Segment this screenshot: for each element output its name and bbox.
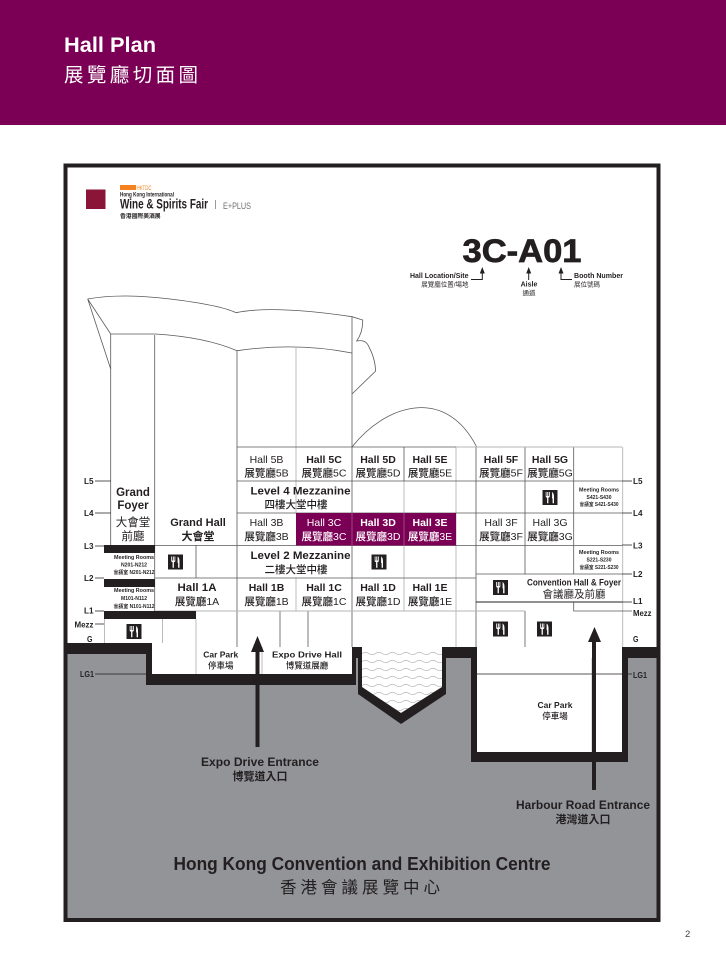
expo drive entrance label: Expo Drive Entrance [201, 757, 319, 769]
level 5 halls: Hall 5E [412, 454, 448, 466]
expo drive hall label [272, 650, 342, 670]
meeting rooms south lower: 會議室 S221-S230 [580, 564, 619, 571]
level 1 halls: Hall 1A [178, 582, 217, 594]
level 2 mezzanine: 二樓大堂中樓 [264, 563, 328, 576]
booth number legend: Aisle [521, 282, 537, 289]
booth number legend: 展位號碼 [574, 280, 600, 289]
meeting rooms south lower [579, 550, 619, 571]
level 3 halls: 展覽廳3G [527, 530, 573, 543]
level 5 halls: Hall 5D [360, 454, 396, 466]
icon: dining 5 [542, 490, 558, 505]
water pit pattern [362, 650, 442, 713]
level ticks: L2 [84, 574, 94, 583]
harbour road entrance label: 港灣道入口 [556, 812, 610, 826]
highlighted halls 3C 3D 3E: Hall 3E [412, 517, 448, 529]
level 4 mezzanine: Level 4 Mezzanine [250, 486, 350, 498]
logo: E+PLUS [223, 201, 251, 211]
level 5 halls: 展覽廳5C [302, 466, 347, 480]
level 5 halls: Hall 5C [306, 454, 342, 466]
meeting rooms north upper: 會議室 N201-N212 [114, 569, 155, 576]
meeting rooms south upper: S421-S430 [586, 495, 612, 501]
meeting rooms south upper [579, 488, 619, 508]
level 5 halls: Hall 5B [250, 454, 283, 466]
meeting rooms north upper [114, 555, 155, 576]
arrow: harbour road entrance [588, 627, 601, 790]
level 3 halls: 展覽廳3B [244, 530, 289, 543]
highlighted halls 3C 3D 3E [296, 513, 456, 546]
level ticks: L3 [84, 542, 94, 551]
expo drive hall label: Expo Drive Hall [272, 650, 342, 660]
meeting rooms south lower: S221-S230 [586, 558, 612, 564]
booth number legend [410, 233, 623, 297]
icon: dining 6 [493, 622, 508, 636]
level 1 halls: 展覽廳1A [175, 595, 219, 608]
logo: Wine & Spirits Fair [120, 197, 209, 212]
level ticks: L2 [633, 570, 643, 579]
logo [86, 185, 251, 220]
level ticks: LG1 [80, 670, 94, 679]
level 3 halls: Hall 3F [484, 517, 518, 529]
meeting rooms north lower: M101-N112 [121, 596, 147, 602]
booth number legend: 展覽廳位置/場地 [421, 280, 469, 289]
expo drive entrance label: 博覽道入口 [232, 769, 288, 783]
meeting rooms north lower [114, 588, 155, 610]
venue name [174, 854, 550, 897]
icon: dining 2 [126, 624, 142, 639]
highlighted halls 3C 3D 3E: Hall 3C [307, 517, 342, 529]
grand hall [170, 517, 226, 543]
car park east label [538, 700, 573, 721]
header banner [0, 0, 726, 125]
page number: 2 [685, 929, 690, 940]
arrow: expo drive entrance [251, 636, 264, 747]
car park west label: 停車場 [208, 660, 234, 670]
meeting rooms south upper: 會議室 S421-S430 [580, 501, 619, 508]
meeting rooms north upper: Meeting Rooms [114, 555, 154, 561]
title: Hall Plan: Hall Plan [64, 34, 156, 57]
level 5 halls: 展覽廳5G [527, 466, 573, 480]
level ticks: L4 [84, 509, 94, 518]
highlighted halls 3C 3D 3E: 展覽廳3C [302, 530, 347, 543]
booth number legend: Booth Number [574, 273, 623, 280]
arrow: hall location [471, 267, 485, 280]
car park west label: Car Park [203, 650, 238, 660]
harbour road entrance label: Harbour Road Entrance [516, 800, 650, 812]
logo: HKTDC [136, 186, 152, 192]
level 5 halls: 展覽廳5B [244, 466, 289, 480]
level ticks: L3 [633, 542, 643, 550]
grand hall: Grand Hall [170, 517, 226, 529]
level 5 halls: 展覽廳5D [356, 466, 401, 480]
highlighted halls 3C 3D 3E: 展覽廳3E [408, 530, 452, 543]
arrow: booth number [558, 267, 572, 280]
car park east label: Car Park [538, 700, 573, 710]
meeting rooms north lower: Meeting Rooms [114, 588, 154, 594]
icon: dining 4 [493, 580, 508, 595]
level ticks: L1 [84, 606, 94, 616]
level ticks: L5 [84, 477, 94, 486]
meeting rooms south upper: Meeting Rooms [579, 488, 619, 494]
panel: floor plan frame [66, 166, 658, 920]
icon: dining 1 [168, 554, 183, 570]
level ticks: L5 [633, 477, 643, 486]
level 1 halls: Hall 1E [412, 582, 448, 594]
grand foyer: 大會堂 [116, 515, 150, 529]
level 1 halls: 展覽廳1C [302, 595, 347, 608]
convention hall and foyer [527, 578, 621, 600]
black corridors [104, 545, 196, 619]
grand foyer: Grand [116, 487, 150, 499]
booth number legend: Hall Location/Site [410, 273, 469, 280]
level ticks [74, 477, 652, 680]
icon: dining 3 [372, 554, 386, 570]
level 4 mezzanine: 四樓大堂中樓 [264, 498, 328, 511]
icon: dining 7 [537, 622, 552, 636]
highlighted halls 3C 3D 3E: Hall 3D [360, 517, 396, 529]
level 1 halls [175, 582, 452, 608]
level ticks: G [87, 635, 92, 644]
level ticks: Mezz [74, 620, 94, 630]
level 5 halls [244, 454, 573, 480]
level ticks: Mezz [633, 609, 652, 618]
meeting rooms north upper: N201-N212 [121, 562, 147, 568]
ground section [67, 641, 657, 918]
level 2 mezzanine: Level 2 Mezzanine [250, 550, 350, 562]
level 3 halls [244, 517, 573, 543]
convention hall and foyer: Convention Hall & Foyer [527, 578, 621, 588]
highlighted halls 3C 3D 3E: 展覽廳3D [356, 530, 401, 543]
logo colour square [86, 190, 106, 209]
expo drive hall label: 博覽道展廳 [286, 660, 329, 670]
level 5 halls: Hall 5G [532, 454, 568, 466]
level ticks: LG1 [633, 671, 647, 680]
title: Chinese: 展覽廳切面圖 [64, 64, 201, 86]
logo: 香港國際美酒展 [120, 212, 161, 220]
building outline [88, 296, 632, 752]
arrow: aisle [526, 267, 531, 280]
level 4 mezzanine [250, 486, 350, 511]
level 1 halls: 展覽廳1E [408, 595, 452, 608]
booth number legend: 通道 [522, 288, 536, 297]
grand foyer: Foyer [117, 500, 149, 512]
venue name: Hong Kong Convention and Exhibition Centre [174, 854, 550, 874]
level ticks: L1 [633, 597, 643, 606]
level 3 halls: 展覽廳3F [479, 530, 523, 543]
level 1 halls: 展覽廳1B [244, 595, 289, 608]
expo drive entrance label [201, 757, 319, 783]
level 5 halls: 展覽廳5F [479, 466, 523, 480]
logo: Hong Kong International [120, 193, 174, 199]
level 1 halls: Hall 1B [249, 582, 285, 594]
level ticks: G [633, 635, 638, 644]
grand foyer: 前廳 [122, 529, 145, 543]
level 1 halls: Hall 1D [360, 582, 396, 594]
harbour road entrance label [516, 800, 650, 826]
level 3 halls: Hall 3B [250, 517, 283, 529]
level 3 halls: Hall 3G [532, 517, 568, 529]
level 5 halls: 展覽廳5E [408, 466, 452, 480]
car park east label: 停車場 [542, 711, 568, 721]
level 5 halls: Hall 5F [484, 454, 519, 466]
level 1 halls: Hall 1C [306, 582, 342, 594]
grand hall: 大會堂 [182, 529, 214, 543]
booth code: 3C-A01 [462, 233, 582, 269]
convention hall and foyer: 會議廳及前廳 [542, 588, 606, 600]
level 2 mezzanine [250, 550, 350, 576]
level ticks: L4 [633, 509, 643, 518]
venue name: 香港會議展覽中心 [280, 878, 444, 897]
meeting rooms south lower: Meeting Rooms [579, 550, 619, 556]
car park west label [203, 650, 238, 670]
grand foyer [116, 487, 150, 543]
level 1 halls: 展覽廳1D [356, 595, 401, 608]
meeting rooms north lower: 會議室 N101-N112 [114, 603, 155, 610]
